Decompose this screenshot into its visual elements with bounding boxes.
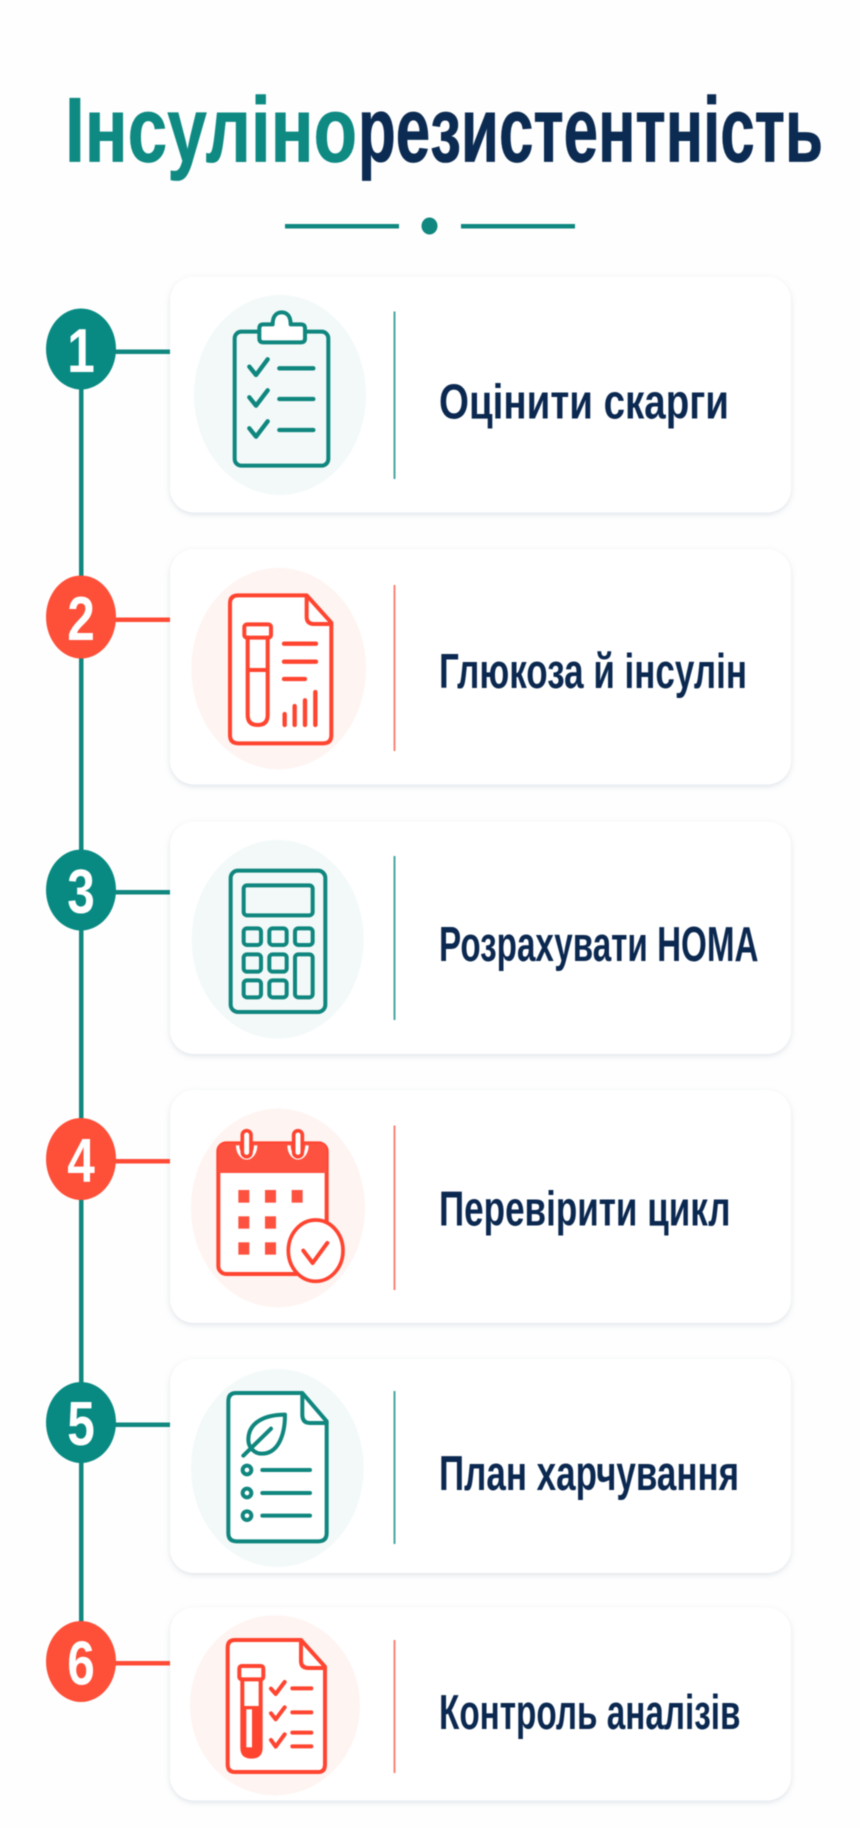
card (170, 276, 791, 512)
label: Перевірити цикл (439, 1182, 730, 1236)
label: Оцінити скарги (439, 376, 729, 430)
number badge 4 (46, 1118, 116, 1200)
number badge 6: 6 (67, 1628, 95, 1698)
connector (113, 1422, 170, 1427)
number badge 5: 5 (67, 1389, 95, 1458)
divider (394, 1640, 396, 1773)
icon: calendar (191, 1109, 365, 1307)
number badge 5 (46, 1382, 116, 1463)
icon: calculator (192, 840, 364, 1039)
number badge 1 (46, 308, 116, 390)
connector (113, 618, 170, 622)
number badge 4: 4 (67, 1125, 95, 1195)
card (170, 1359, 791, 1573)
divider (394, 585, 396, 751)
divider (394, 312, 396, 479)
divider (394, 856, 396, 1020)
card (170, 549, 791, 784)
title: Інсуліно (65, 80, 357, 182)
divider (394, 1126, 396, 1290)
icon: nutrition plan (191, 1369, 364, 1567)
panel: step 4 (46, 1090, 791, 1323)
connector (113, 1661, 170, 1666)
icon: lab report (191, 568, 366, 769)
title divider (285, 218, 575, 234)
number badge 1: 1 (67, 316, 95, 385)
label: Глюкоза й інсулін (439, 645, 747, 699)
card (170, 822, 791, 1054)
panel: step 5 (46, 1359, 791, 1573)
divider (394, 1391, 396, 1544)
panel: step 3 (46, 822, 791, 1054)
connector (113, 890, 170, 894)
number badge 3: 3 (67, 857, 95, 926)
panel: step 1 (46, 276, 791, 512)
connector (113, 1159, 170, 1164)
panel: step 2 (46, 549, 791, 784)
icon: clipboard (194, 295, 366, 495)
number badge 3 (46, 850, 116, 930)
number badge 2 (46, 576, 116, 658)
number badge 6 (46, 1621, 116, 1702)
card (170, 1608, 791, 1800)
panel: step 6 (46, 1608, 791, 1800)
number badge 2: 2 (67, 584, 95, 653)
icon: test tube checklist (190, 1615, 360, 1795)
timeline vertical line (79, 349, 84, 1662)
connector (113, 350, 170, 354)
title (65, 80, 823, 182)
label: План харчування (439, 1447, 739, 1501)
card (170, 1090, 791, 1323)
